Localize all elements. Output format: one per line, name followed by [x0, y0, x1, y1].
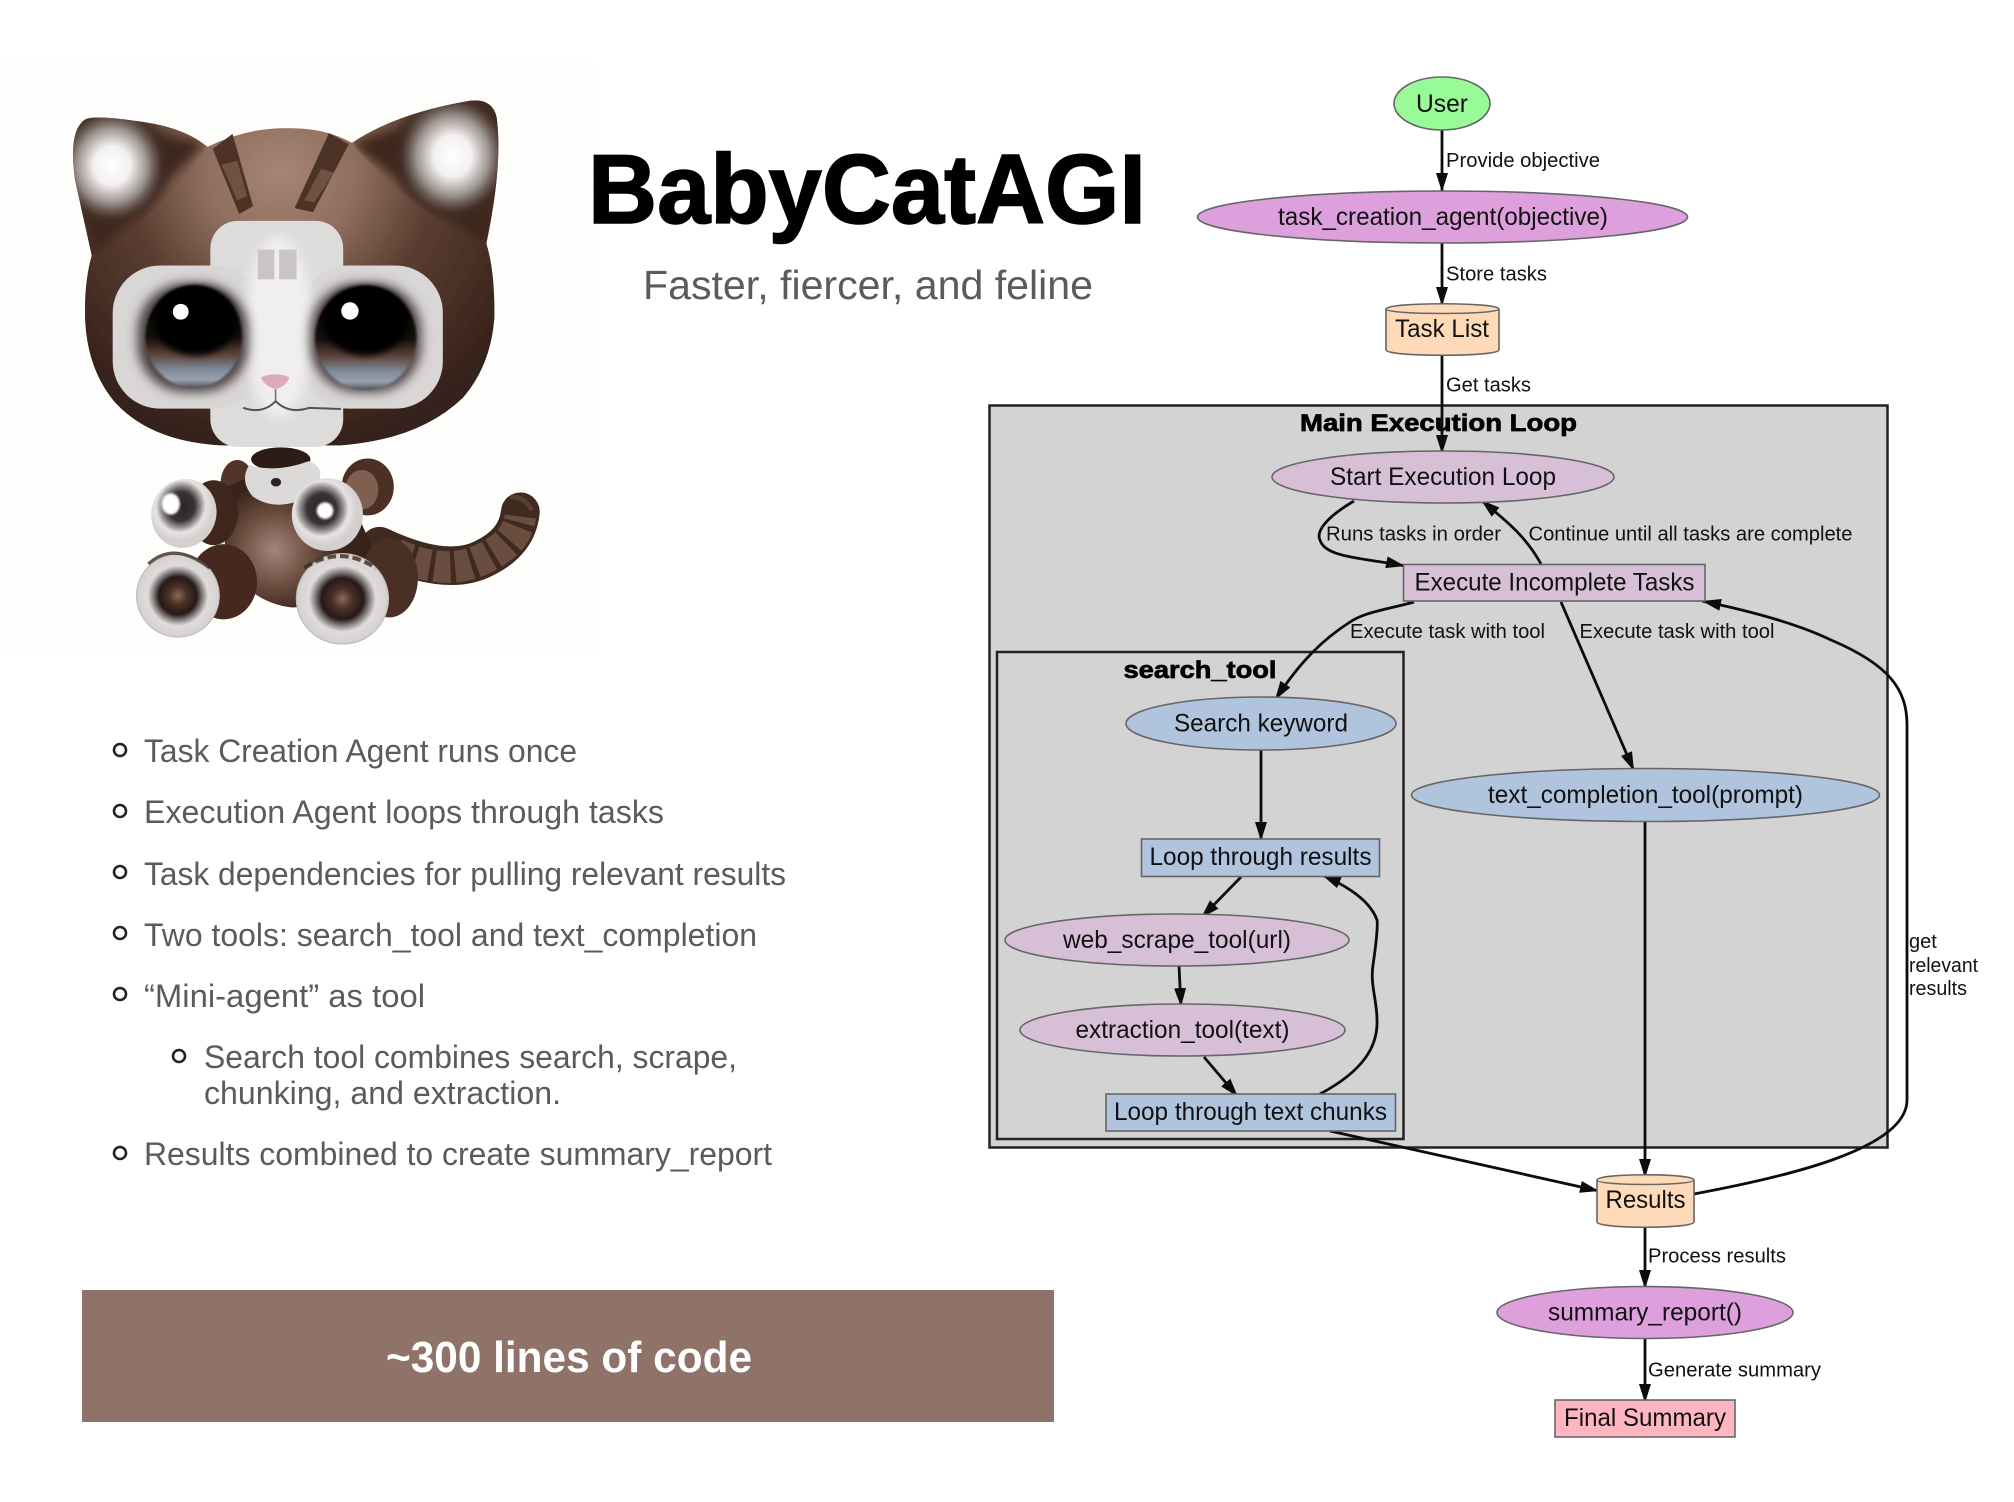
cat forehead stripes [213, 133, 349, 214]
cat face mask [113, 221, 443, 447]
label: generate summary: Generate summary [1648, 1360, 1821, 1382]
label: runs tasks in order: Runs tasks in order [1326, 524, 1501, 546]
bullet: task creation agent: Task Creation Agent runs once [144, 733, 577, 769]
cat nose and mouth [243, 374, 341, 410]
label: get relevant results: relevant [1909, 955, 1978, 977]
arrow: results to summary report [1644, 1225, 1646, 1289]
node: user: User [1416, 90, 1468, 118]
node: loop through results: Loop through results [1150, 843, 1372, 871]
node: summary report: summary_report() [1548, 1298, 1742, 1326]
bullet: execution agent: Execution Agent loops through tasks [144, 794, 664, 830]
node: start execution loop [1272, 451, 1614, 503]
label: execute task with tool, left: Execute task with tool [1350, 621, 1545, 643]
arrow: text chunks to results [1330, 1131, 1599, 1191]
subtitle: Faster, fiercer, and feline [643, 262, 1093, 308]
node: task list [1386, 304, 1499, 355]
callout: lines of code [82, 1290, 1054, 1422]
node: text completion tool [1412, 768, 1880, 822]
cat head dome [85, 128, 494, 446]
node: user [1394, 77, 1490, 130]
node: loop through text chunks: Loop through text chunks [1114, 1098, 1387, 1126]
arrow: execute tasks to search keyword [1275, 602, 1414, 700]
node: search keyword: Search keyword [1174, 710, 1348, 738]
arrow: extraction to text chunks [1204, 1057, 1238, 1097]
label: get relevant results [1909, 931, 1978, 1000]
panel: search tool [997, 652, 1404, 1139]
node: text completion tool: text_completion_tool(prompt) [1488, 781, 1803, 809]
panel: search tool: search_tool [1124, 657, 1276, 684]
label: get relevant results: get [1909, 931, 1937, 953]
sub-bullet: search tool: Search tool combines search, scrape, [204, 1039, 737, 1075]
cat image backdrop [0, 62, 596, 654]
arrow: summary report to final summary [1644, 1339, 1646, 1403]
bullet list [114, 733, 786, 1172]
label: get tasks: Get tasks [1446, 374, 1531, 396]
bullet: task dependencies: Task dependencies for pulling relevant results [144, 856, 786, 892]
panel: main execution loop [990, 406, 1888, 1148]
arrow: execute tasks back to start loop [1481, 500, 1541, 564]
bullet: two tools: Two tools: search_tool and text_completion [144, 917, 757, 953]
node: execute incomplete tasks: Execute Incomplete Tasks [1414, 568, 1694, 596]
label: provide objective: Provide objective [1446, 150, 1600, 172]
arrow: text completion to results [1644, 822, 1646, 1178]
arrow: execute tasks to text completion [1561, 602, 1634, 771]
arrow: task creation to task list [1441, 243, 1443, 306]
arrow: search keyword to loop results [1260, 750, 1262, 841]
arrow: user to task creation [1441, 130, 1443, 192]
label: process results: Process results [1648, 1246, 1786, 1268]
arrow: web scrape to extraction [1179, 966, 1181, 1007]
node: extraction tool [1020, 1004, 1345, 1056]
node: task creation agent [1198, 191, 1688, 243]
label: execute task with tool, right: Execute task with tool [1580, 621, 1774, 643]
node: results [1597, 1175, 1694, 1227]
node: final summary: Final Summary [1564, 1404, 1726, 1432]
node: web scrape tool [1005, 914, 1349, 966]
node: start execution loop: Start Execution Loop [1330, 463, 1556, 491]
title: BabyCatAGI [588, 134, 1146, 244]
cat body [189, 447, 418, 619]
bullet: mini-agent: “Mini-agent” as tool [144, 978, 425, 1014]
panel: main execution loop: Main Execution Loop [1300, 410, 1577, 437]
flowchart [990, 77, 1978, 1437]
cat ears [51, 87, 516, 256]
cat head [73, 100, 498, 446]
callout: lines of code: ~300 lines of code [386, 1333, 752, 1382]
cat tail [380, 497, 532, 567]
node: results: Results [1606, 1186, 1686, 1214]
label: store tasks: Store tasks [1446, 264, 1547, 286]
bullet: results combined: Results combined to create summary_report [144, 1136, 772, 1172]
node: task list: Task List [1395, 315, 1489, 343]
sub-bullet: search tool: chunking, and extraction. [204, 1075, 561, 1111]
label: get relevant results: results [1909, 978, 1967, 1000]
cat paws [136, 470, 389, 645]
cat eyes [138, 283, 421, 392]
node: web scrape tool: web_scrape_tool(url) [1062, 926, 1291, 954]
arrow: start loop to execute tasks [1319, 501, 1405, 566]
node: search keyword [1126, 697, 1396, 750]
node: extraction tool: extraction_tool(text) [1076, 1016, 1290, 1044]
node: task creation agent: task_creation_agent(objective) [1278, 203, 1608, 231]
arrow: text chunks back to loop results [1320, 875, 1377, 1094]
label: continue until complete: Continue until all tasks are complete [1528, 524, 1852, 546]
sub-bullet: search tool [173, 1039, 737, 1111]
arrow: results back to execute tasks [1694, 601, 1907, 1194]
arrow: task list to start loop [1441, 355, 1443, 454]
arrow: loop results to web scrape [1201, 877, 1241, 918]
icon: robot kitten mascot [51, 87, 532, 645]
node: summary report [1497, 1286, 1793, 1338]
